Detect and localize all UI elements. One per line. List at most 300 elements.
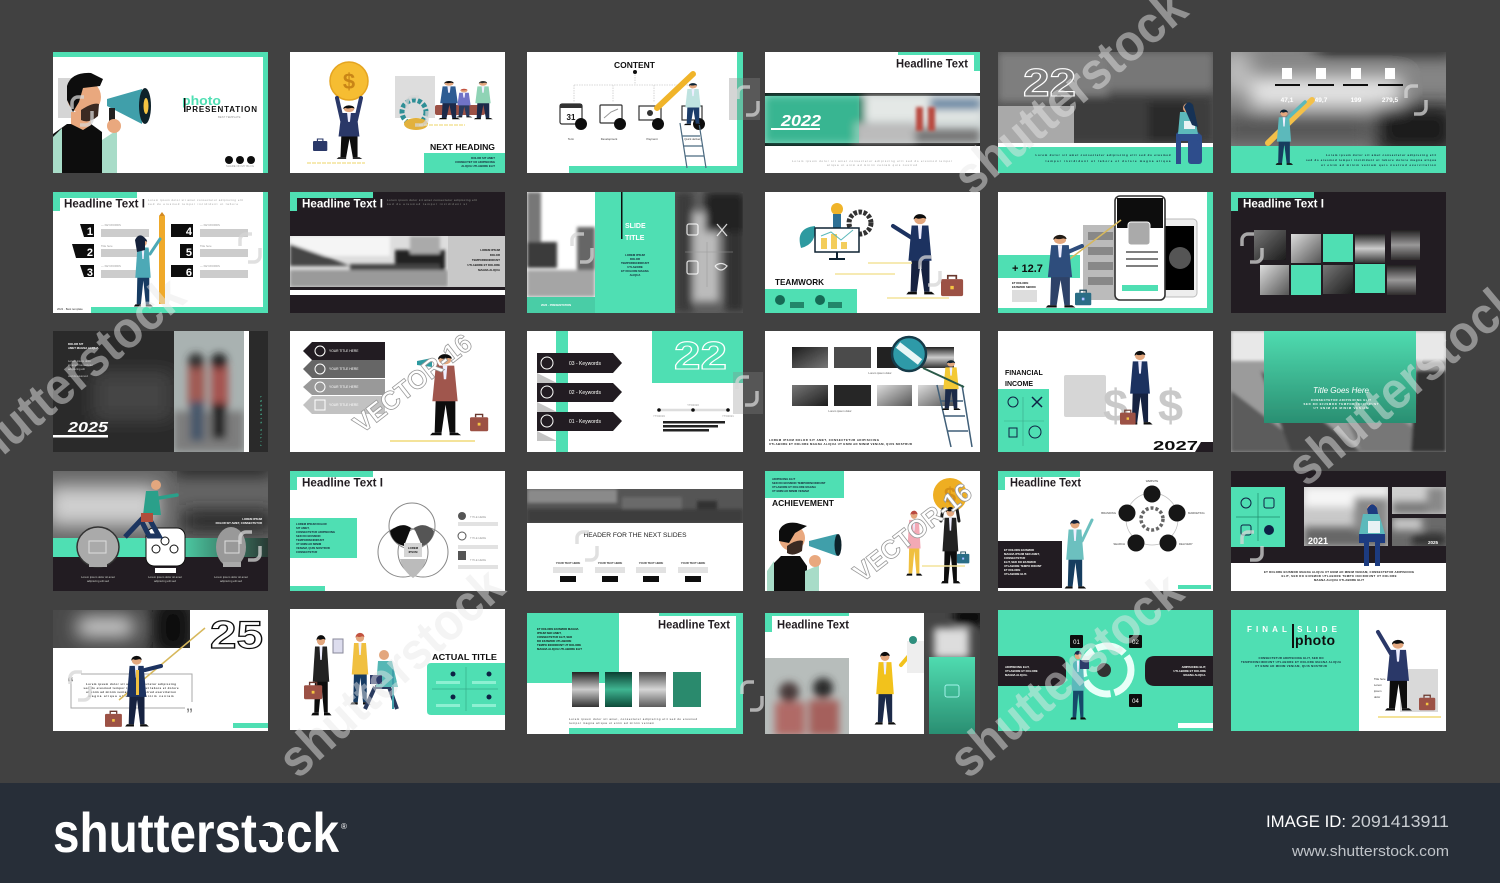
icon: briefcase <box>105 711 122 727</box>
intro <box>387 198 477 206</box>
small text: Title here <box>1374 677 1386 681</box>
icon: monitor <box>600 105 626 130</box>
dark text box: ET DOLORE <box>1004 568 1020 572</box>
photo right <box>924 613 980 734</box>
quote frame: “ <box>67 674 74 690</box>
mint tag <box>290 586 325 591</box>
photo strip <box>527 489 743 523</box>
text: sit amet consectetur <box>68 363 93 367</box>
illustration: teamwork dashboard <box>800 203 871 259</box>
logo: shutterstock: ® <box>341 822 347 831</box>
side text <box>467 248 501 272</box>
panel: content timeline <box>527 52 743 173</box>
title <box>182 93 257 119</box>
illustration: man with pointer <box>1046 220 1121 307</box>
text: TEMPORINCIDIDUNT UTLABORE ET DOLORE MAGNA ALIQUA <box>1241 660 1341 664</box>
grey rect <box>1400 669 1438 712</box>
panel: three steps <box>53 471 268 591</box>
ring <box>1083 646 1131 694</box>
panel: headline dark with photo <box>290 192 505 313</box>
list text: — KEYWORDS <box>101 264 121 268</box>
mint box <box>424 153 505 173</box>
text <box>1241 656 1341 668</box>
illustration: woman with pencil <box>134 212 165 307</box>
center icon <box>146 528 185 566</box>
illustration: man lifting coin: $ <box>343 69 355 94</box>
list text: Title here <box>200 244 212 248</box>
mint box: SED DO EIUSMOD TEMPORINCIDIDUNT <box>772 481 826 485</box>
text: DOLOR SIT <box>68 342 84 346</box>
mint box <box>427 663 505 715</box>
side text <box>216 517 263 525</box>
small text <box>1374 677 1386 699</box>
year <box>53 419 109 438</box>
number chips <box>1070 635 1142 707</box>
mint band: Lorem ipsum dolor sit amet consectetur adipiscing elit <box>1326 153 1436 157</box>
illustration: gear and coins <box>402 100 428 130</box>
grey square <box>395 76 435 118</box>
caption <box>769 438 912 446</box>
illustration: man on phone <box>1120 351 1153 425</box>
captions: adipiscing elit sed <box>220 579 242 583</box>
cycle: DELIVERY <box>1179 542 1193 546</box>
dark text box: UTLABORE ELIT. <box>1004 572 1027 576</box>
caption: UTLABORE ET DOLORE MAGNA ALIQUA UT ENIM AD MINIM VENIAM, QUIS NOSTRUD <box>769 442 912 446</box>
mint band <box>1231 146 1446 173</box>
arrow list: YOUR TITLE HERE <box>329 403 359 407</box>
panel: next heading <box>290 52 505 173</box>
heading: CONTENT <box>614 60 656 70</box>
white tag <box>1178 723 1213 728</box>
icon: coin: $ <box>944 483 956 508</box>
yellow lines <box>835 263 949 298</box>
sofa <box>435 105 485 115</box>
small text: ET DOLORE <box>1012 281 1028 285</box>
number chips: 01 <box>1073 640 1080 646</box>
arrow list: YOUR TITLE HERE <box>329 349 359 353</box>
mint box: SED DO EIUSMOD <box>296 534 321 538</box>
photo <box>53 610 190 648</box>
arrow list <box>303 342 385 414</box>
dark pills: MAGNA ALIQUA. <box>1183 673 1206 677</box>
mint box: CONSECTETUR ADIPISICING ELIT <box>1311 398 1371 402</box>
photo bottom right: 2025 <box>1428 540 1439 545</box>
mint panel <box>595 192 675 313</box>
thumbnails <box>572 672 701 707</box>
dark text box: ET DOLORE EIUSMOD <box>1004 548 1034 552</box>
number chips: 04 <box>1132 699 1139 705</box>
illustration: businessman <box>893 214 935 294</box>
heading: NEXT HEADING <box>430 142 495 152</box>
numbered blocks: 2 <box>87 247 93 259</box>
venn diagram <box>378 503 448 578</box>
stats row: 279,5 <box>1382 97 1399 104</box>
caption <box>569 717 697 725</box>
photo: two people <box>174 331 244 452</box>
side text: LOREM IPSUM <box>242 517 263 521</box>
mint box: IPSUM SED AMET, <box>537 631 562 635</box>
watermark: vector <box>347 328 978 588</box>
white stripe <box>290 290 505 295</box>
heading: Headline Text I <box>302 196 383 210</box>
website: www.shutterstock.com <box>1291 843 1449 860</box>
white stripe <box>244 331 249 452</box>
keyword arrows: 02 - Keywords <box>569 390 601 396</box>
panel: actual title <box>290 609 505 730</box>
side text: DOLOR <box>490 253 500 257</box>
dark text box <box>998 541 1062 588</box>
small text: ipsum <box>1374 689 1382 693</box>
intro text: sed do eiusmod tempor incididunt ut labore <box>148 202 238 206</box>
panel: phone mockup <box>998 192 1213 313</box>
yellow line <box>922 565 965 567</box>
text: CONSECTETUR ADIPISICING ELIT, SED DO <box>1258 656 1324 660</box>
four columns: YOUR TEXT HERE <box>556 561 580 565</box>
venn diagram: LOREM <box>408 546 419 550</box>
illustration: man in yellow <box>875 651 913 724</box>
dark pills <box>998 656 1213 686</box>
illustration: man in coat pointing up <box>1378 632 1412 711</box>
panel: headline with numbered list <box>53 192 268 313</box>
number 22: 22 <box>1023 62 1076 105</box>
text: AMET MAGNA ALIQUA <box>68 346 99 350</box>
mint box: CONSECTETUR ADIPISICING <box>296 530 335 534</box>
illustration: woman pointing <box>1065 520 1092 589</box>
mint band: sed do eiusmod tempor incididunt ut labore dolore magna aliqua <box>1306 158 1436 162</box>
mint panel: DOLOR <box>630 257 640 261</box>
photo top right <box>1392 487 1446 514</box>
social icons <box>225 156 255 168</box>
side text: TEMPORINCIDIDUNT <box>472 258 500 262</box>
mint corner <box>898 52 980 71</box>
text <box>68 342 99 378</box>
grey circles <box>77 527 246 567</box>
stats row: 199 <box>1351 97 1362 104</box>
caption: tempor magna aliqua ut enim ad minim veniam <box>569 721 655 725</box>
intro: Lorem ipsum dolor sit amet consectetur adipiscing elit <box>387 198 477 202</box>
grey list panel <box>1083 225 1117 300</box>
heading: photo <box>1295 632 1335 648</box>
numbered blocks: 1 <box>87 226 93 238</box>
footer bar <box>0 783 1500 883</box>
side text: DOLOR SIT AMET, CONSECTETUR <box>216 521 262 525</box>
mint box: LOREM IPSUM DOLOR <box>296 522 327 526</box>
second phone <box>1161 219 1197 297</box>
watermark: shutterstock: shutterstock <box>938 562 1194 789</box>
heading: Headline Text I <box>302 476 383 490</box>
mint value band <box>998 255 1080 278</box>
illustration: man lifting coin <box>330 62 368 159</box>
photo large: 2021 <box>1308 536 1328 546</box>
caption <box>792 159 952 167</box>
caption: Lorem ipsum dolor sit amet, consectetur adipiscing elit sed do eiusmod <box>569 717 697 721</box>
panel: header for next slides <box>527 471 743 591</box>
heading: HEADER FOR THE NEXT SLIDES <box>584 532 687 539</box>
bars <box>663 421 725 432</box>
mint box: TEMPORINCIDIDUNT <box>296 538 324 542</box>
mint band: ut enim ad minim veniam quis nostrud exercitation <box>1321 163 1436 167</box>
mint panel: TITLE <box>625 235 645 242</box>
thumbnails: Lorem ipsum dolor <box>828 409 852 413</box>
arrow list: YOUR TITLE HERE <box>329 367 359 371</box>
dark pills: ADIPISICING ELIT, <box>1005 665 1030 669</box>
mint stripe <box>556 331 568 452</box>
social icons: SHARE ON MY BLOG <box>226 164 254 168</box>
photo: street <box>290 236 505 287</box>
caption: MAGNA ALIQUA UTLABORE ELIT <box>1314 578 1364 582</box>
mint box <box>765 289 857 313</box>
number chips: 02 <box>1132 640 1139 646</box>
mint box: ALIQUA UTLABORE ELIT <box>461 164 495 168</box>
grey money <box>1064 375 1183 431</box>
heading: Headline Text <box>658 618 730 632</box>
heading: Headline Text <box>777 618 849 632</box>
icon: coin <box>933 478 967 512</box>
numbered blocks: 3 <box>87 267 93 279</box>
illustration: woman with tablet <box>1070 651 1089 720</box>
number 25: 25 <box>210 614 263 657</box>
mint footer: 2022 · PRESENTATION <box>541 303 571 307</box>
grey money: $ <box>1103 380 1128 431</box>
main phone <box>1115 196 1165 300</box>
panel: photo presentation cover <box>53 52 268 173</box>
photo bottom right <box>1392 518 1446 546</box>
caption: ET DOLORE EIUSMOD MAGNA ALIQUA UT ENIM AD MINIM VENIAM, CONSECTETUR ADIPISICING <box>1264 570 1414 574</box>
illustration: three people <box>304 633 398 715</box>
quote frame: magna aliqua ut enim ad minim veniam <box>89 694 174 698</box>
quote frame <box>66 670 197 721</box>
mint box: VENIAM, QUIS NOSTRUD <box>296 546 330 550</box>
small paper <box>907 636 924 673</box>
mint box: DOLOR SIT AMET <box>471 156 495 160</box>
heading: FINAL SLIDE <box>1247 625 1338 634</box>
small text: dolor <box>1374 695 1380 699</box>
dark pills: MAGNA ALIQUA. <box>1005 673 1028 677</box>
photo band <box>765 93 980 146</box>
photo left <box>527 192 595 297</box>
mint band: tempor incididunt ut labore et dolore magna aliqua <box>1046 159 1171 163</box>
mint box <box>1231 487 1285 547</box>
heading: Headline Text <box>896 56 968 70</box>
heading: Headline Text I <box>64 196 145 210</box>
heading <box>1247 624 1338 648</box>
list: TITLE HERE <box>470 515 486 519</box>
mint box: CONSECTET UR ADIPISICING <box>455 160 495 164</box>
stats row <box>1275 68 1403 104</box>
list: TITLE HERE <box>470 558 486 562</box>
logo: shutterstock: shutterstock <box>53 801 340 864</box>
quote frame: Lorem ipsum dolor sit amet consectetur adipiscing <box>86 682 176 686</box>
icon: briefcase <box>313 139 327 151</box>
text: Lorem ipsum dolor <box>68 359 91 363</box>
yellow line <box>1378 716 1441 718</box>
side text: MAGNA ALIQUA <box>478 268 500 272</box>
mint box: Title Goes Here <box>1313 386 1370 395</box>
list <box>458 512 498 569</box>
mint band <box>998 143 1213 173</box>
cycle <box>1101 479 1205 552</box>
slide grid <box>48 40 1456 736</box>
heading: ACTUAL TITLE <box>432 653 498 662</box>
cycle: WEBSITE <box>1146 479 1158 483</box>
photo: two people <box>765 658 849 734</box>
caption: aliqua ut enim ad minim veniam quis nostrud <box>827 163 917 167</box>
illustration: man with pencil <box>1268 100 1312 165</box>
mint box: UT ENIM AD MINIM VENIAM <box>772 489 810 493</box>
heading: FINANCIAL <box>1005 370 1043 377</box>
thumbnails: Lorem ipsum dolor <box>868 371 892 375</box>
panel: slide title <box>527 192 743 313</box>
dark text box: MAGNA IPSUM SED AMET, <box>1004 552 1040 556</box>
icon: calendar <box>560 104 587 130</box>
panel: venn diagram <box>290 471 505 591</box>
mint box <box>765 471 844 498</box>
mint panel: SLIDE <box>625 223 646 230</box>
heading <box>1005 370 1043 388</box>
mint box: SED DO EIUSMOD TEMPOR INCIDIDUNT <box>1304 402 1379 406</box>
mint footer <box>527 297 595 313</box>
list text: — KEYWORDS <box>200 223 220 227</box>
illustration: man climbing <box>125 480 177 537</box>
captions: Lorem ipsum dolor sit amet <box>214 575 248 579</box>
vertical caption: TITLE ELEMENT <box>259 396 263 446</box>
heading: INCOME <box>1005 381 1033 388</box>
tiles <box>1254 230 1420 295</box>
mint box: UTLABORE ET DOLORE MAGNA <box>772 485 816 489</box>
light rect <box>998 106 1074 143</box>
mint box: MAGNA ALIQUA UTLABORE ELIT <box>537 647 582 651</box>
panel: headline text 2022 <box>765 52 980 173</box>
small text <box>1012 281 1037 302</box>
icon: briefcase <box>470 414 488 431</box>
side text: UTLABORE ET DOLORE <box>467 263 500 267</box>
year: 2027 <box>1153 438 1198 453</box>
panel: title goes here <box>1231 331 1446 452</box>
mint box: UT ENIM AD MINIM <box>296 542 322 546</box>
captions: adipiscing elit sed <box>154 579 176 583</box>
dark text box: ELIT, SED DO EIUSMOD <box>1004 560 1036 564</box>
cycle: SEARCH <box>1113 542 1125 546</box>
keyword arrows: 01 - Keywords <box>569 419 601 425</box>
quote frame: ” <box>186 705 193 721</box>
labels: Term <box>568 137 575 141</box>
panel: cycle diagram <box>998 471 1213 591</box>
illustration: man with megaphone <box>53 73 151 173</box>
year: 2025 <box>67 419 109 436</box>
watermark: vector: VECTOR-16 <box>347 328 478 439</box>
icon: briefcase <box>1075 290 1091 305</box>
mint panel: TEMPORINCIDIDUNT <box>621 261 649 265</box>
mint box <box>998 389 1049 452</box>
quote frame: sed do eiusmod tempor incididunt ut labore et dolore <box>84 686 179 690</box>
labels: Payment <box>646 137 658 141</box>
illustration: magnifier, ladder and person <box>892 337 972 447</box>
cycle: BRANDING <box>1101 511 1116 515</box>
numbered blocks <box>72 224 193 279</box>
mint panel: LOREM IPSUM <box>625 253 646 257</box>
numbered blocks: 6 <box>186 267 192 279</box>
mint box <box>290 518 357 558</box>
panel: dark tile gallery <box>1231 192 1446 313</box>
yellow captions <box>307 125 465 163</box>
illustration: man with megaphone <box>767 523 842 591</box>
list text <box>101 223 248 278</box>
illustration: seated woman <box>1359 504 1385 566</box>
mint box: TEMPO INCIDIDUNT UT DOLORE <box>537 643 581 647</box>
mint tag <box>1178 585 1211 589</box>
dark pills: UTLABORE ET DOLORE <box>1173 669 1206 673</box>
caption: Lorem ipsum dolor sit amet consectetur adipiscing elit sed do eiusmod tempor <box>792 159 952 163</box>
numbered blocks: 5 <box>186 247 192 259</box>
year: 2022 <box>780 113 821 130</box>
small text: Lorem <box>1374 683 1383 687</box>
illustration: three people <box>439 81 493 119</box>
watermark: vector: VECTOR-16 <box>847 477 978 588</box>
yellow line <box>390 440 475 442</box>
photo large <box>1304 487 1388 546</box>
captions: Lorem ipsum dolor sit amet <box>148 575 182 579</box>
labels: Development <box>601 137 617 141</box>
heading: Headline Text I <box>1243 196 1324 210</box>
grey square behind head <box>58 78 74 118</box>
watermark: shutterstock: shutterstock <box>267 557 516 789</box>
panel: numbers on photo <box>1231 52 1446 173</box>
illustration: woman and man <box>906 507 969 583</box>
mint tag <box>233 723 268 728</box>
mint box: UT ENIM AD MINIM VENIAM <box>1314 406 1369 410</box>
panel: 2025 dark photo <box>53 331 268 452</box>
dark text box: CONSECTETUR <box>1004 556 1025 560</box>
title: BEST TEMPLATE <box>218 115 241 119</box>
photo right with icons <box>675 192 743 313</box>
panel: 2021 photo wall <box>1231 471 1446 591</box>
four columns: YOUR TEXT HERE <box>639 561 663 565</box>
text: sed do eiusmod <box>68 374 88 378</box>
mint panel: ALIQUA <box>630 273 640 277</box>
footer mark: 2022 · Best template <box>57 307 83 311</box>
keyword arrows <box>537 353 622 441</box>
panel: arrow list <box>290 331 505 452</box>
venn diagram: IPSUM <box>409 550 418 554</box>
mint panel: ET DOLORE MAGNA <box>621 269 649 273</box>
panel: financial income <box>998 331 1213 453</box>
mint box with number <box>652 331 743 383</box>
mint box: CONSECTETUR ELIT, SED <box>537 635 572 639</box>
dashed connectors <box>574 72 695 102</box>
caption: ELIT, SED DO EIUSMOD UTLABORE TEMPO INCIDIDUNT UT DOLORE <box>1282 574 1397 578</box>
heading: Headline Text <box>1010 476 1081 490</box>
grey money: $ <box>1158 380 1183 431</box>
mint band <box>53 538 268 557</box>
icon: banknote <box>639 106 664 130</box>
year <box>1153 438 1213 453</box>
mint box: DO EIUSMOD UTLABORE <box>537 639 571 643</box>
watermark: bracket marks <box>70 78 1426 710</box>
side text: LOREM IPSUM <box>480 248 501 252</box>
dark pills: UTLABORE ET DOLORE <box>1005 669 1038 673</box>
panel: final slide <box>1231 610 1446 731</box>
panel: person and photos <box>765 613 980 734</box>
text: adipiscing elit <box>68 367 85 371</box>
panel: 25 quote <box>53 610 268 731</box>
list: TITLE HERE <box>470 536 486 540</box>
panel: 22 photo <box>998 52 1213 173</box>
captions: adipiscing elit sed <box>87 579 109 583</box>
image id: IMAGE ID: <box>1266 812 1346 831</box>
list text: Title here <box>101 244 113 248</box>
illustration: man with megaphone in brown coat <box>417 354 461 435</box>
timeline <box>653 403 734 418</box>
